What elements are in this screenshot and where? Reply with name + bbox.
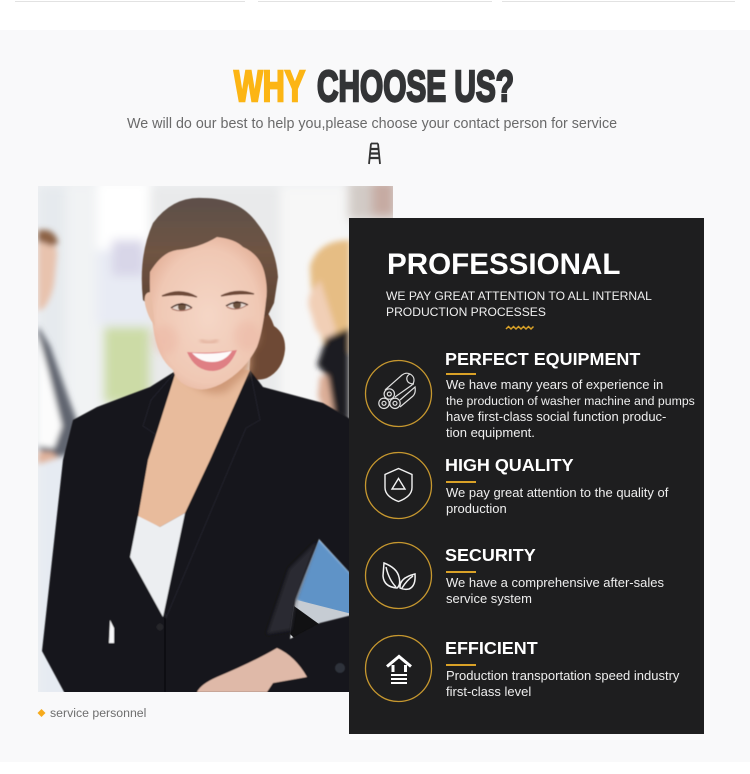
description: We have many years of experience in	[446, 377, 663, 392]
panel subheading: PRODUCTION PROCESSES	[386, 305, 546, 319]
feature: security	[364, 542, 664, 610]
jacket sheen	[267, 541, 317, 634]
underline	[446, 373, 476, 374]
description	[446, 485, 668, 516]
feature: perfect equipment	[364, 349, 695, 440]
button	[156, 624, 164, 630]
heading: HIGH QUALITY	[445, 455, 574, 475]
description: We have a comprehensive after-sales	[446, 575, 664, 590]
heading: PERFECT EQUIPMENT	[445, 349, 640, 369]
icon: shield	[364, 452, 432, 520]
icon: pipes	[364, 360, 432, 428]
jacket	[42, 370, 352, 703]
chin shadow	[176, 340, 250, 394]
description: first-class level	[446, 684, 531, 699]
title	[233, 62, 514, 110]
description	[446, 377, 695, 440]
description	[446, 668, 680, 699]
description	[446, 575, 664, 606]
shirt	[130, 513, 185, 617]
icon: home arrow	[364, 634, 432, 702]
mouth	[187, 350, 237, 371]
subtitle: We will do our best to help you,please choose your contact person for service	[127, 116, 617, 132]
hair	[142, 198, 278, 319]
hand	[197, 648, 307, 692]
description: Production transportation speed industry	[446, 668, 679, 683]
panel: professional	[349, 218, 704, 734]
icon: leaves	[364, 542, 432, 610]
neck and chest	[138, 368, 250, 527]
blue object at right	[296, 538, 352, 618]
top strip: cropped card edges	[15, 1, 735, 2]
description: service system	[446, 591, 532, 606]
panel heading: PROFESSIONAL	[387, 248, 620, 280]
eyebrows	[162, 291, 254, 297]
description: the production of washer machine and pumps	[446, 394, 695, 408]
description: have first-class social function produc-	[446, 409, 666, 424]
face	[150, 237, 267, 389]
description: We pay great attention to the quality of	[446, 485, 668, 500]
underline	[446, 571, 476, 572]
bun and back hair	[249, 306, 285, 380]
panel subheading	[386, 289, 652, 319]
description: tion equipment.	[446, 425, 535, 440]
eyes	[171, 301, 248, 311]
sleeve button	[335, 663, 345, 673]
feature: efficient	[364, 634, 680, 702]
icon: ladder ornament	[368, 142, 381, 164]
underline	[446, 664, 476, 666]
description: production	[446, 501, 507, 516]
heading: SECURITY	[445, 545, 536, 565]
panel subheading: WE PAY GREAT ATTENTION TO ALL INTERNAL	[386, 289, 652, 303]
photo: smiling service representative	[38, 186, 393, 692]
background colleagues	[38, 230, 350, 464]
heading: EFFICIENT	[445, 638, 538, 658]
cheek blush	[152, 325, 178, 355]
lapels	[141, 370, 177, 618]
nose	[200, 340, 218, 342]
title: WHY	[234, 62, 305, 110]
caption: service personnel	[50, 706, 146, 720]
arm gap	[109, 620, 114, 643]
wavy ornament	[506, 326, 534, 330]
feature: high quality	[364, 452, 668, 520]
underline	[446, 481, 476, 482]
